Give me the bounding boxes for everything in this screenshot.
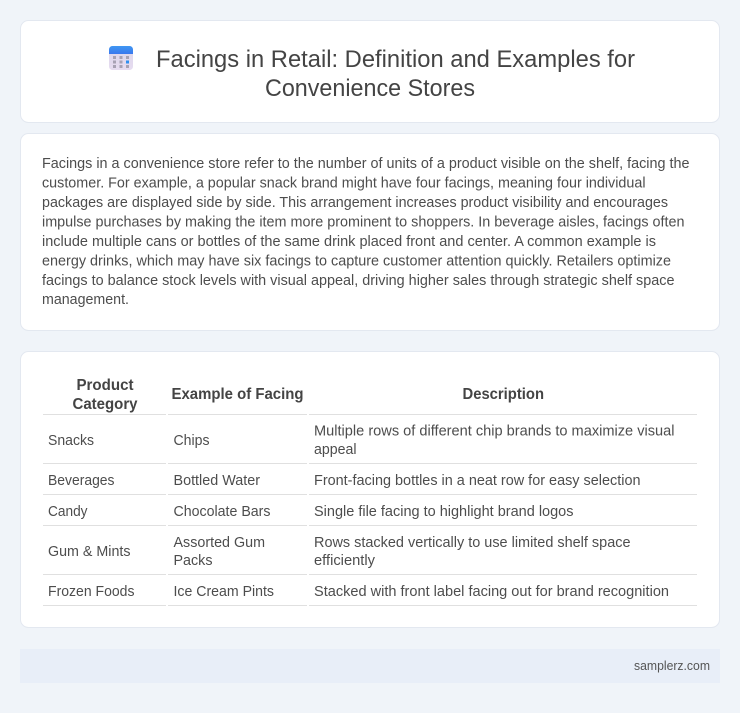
- table row: candy: Chocolate Bars: [174, 504, 270, 520]
- panel: introduction: [20, 134, 720, 330]
- title text: [156, 46, 635, 102]
- text block: definition paragraph: customer. For example, a popular snack brand might have four facings, meaning four individual: [42, 176, 646, 192]
- table row: beverages: Bottled Water: [174, 473, 260, 489]
- title text: Convenience Stores: [265, 75, 475, 102]
- table row: frozen foods: Ice Cream Pints: [174, 584, 274, 600]
- icon: calendar: [109, 46, 133, 70]
- table row: candy: [48, 504, 574, 520]
- table row: gum and mints: efficiently: [314, 553, 376, 569]
- table row: candy: Single file facing to highlight brand logos: [314, 504, 574, 520]
- table row: frozen foods: [48, 584, 669, 600]
- table row: candy: Candy: [48, 504, 88, 520]
- table row: gum and mints: Rows stacked vertically to use limited shelf space: [314, 535, 630, 551]
- title text: Facings in Retail: Definition and Examples for: [156, 46, 635, 73]
- text block: definition paragraph: [42, 156, 690, 308]
- text block: definition paragraph: packages are displayed side by side. This arrangement increases product visibility and encourages: [42, 195, 668, 211]
- table row: beverages: [48, 473, 640, 489]
- table row: beverages: Beverages: [48, 473, 114, 489]
- text block: definition paragraph: impulse purchases by making the item more prominent to shoppers. In beverage aisles, facings often: [42, 214, 684, 230]
- panel: table: [20, 352, 720, 628]
- table header: [72, 377, 544, 413]
- table row: gum and mints: Packs: [174, 553, 212, 569]
- table row: gum and mints: Assorted Gum: [174, 535, 265, 551]
- table row: snacks: Snacks: [48, 433, 94, 449]
- table header: Product: [76, 377, 134, 394]
- table row: snacks: appeal: [314, 442, 356, 458]
- text block: definition paragraph: Facings in a convenience store refer to the number of units of a product visible on the shelf, facing the: [42, 156, 690, 172]
- text block: definition paragraph: include multiple cans or bottles of the same drink placed front and center. A common example is: [42, 234, 656, 250]
- table row: snacks: [48, 424, 674, 458]
- table row: frozen foods: Frozen Foods: [48, 584, 134, 600]
- table row: snacks: Chips: [174, 433, 210, 449]
- panel: title: [20, 20, 720, 122]
- table row: beverages: Front-facing bottles in a neat row for easy selection: [314, 473, 640, 489]
- table row: snacks: Multiple rows of different chip brands to maximize visual: [314, 424, 674, 440]
- footer: [20, 649, 720, 683]
- table row: frozen foods: Stacked with front label facing out for brand recognition: [314, 584, 669, 600]
- table row: gum and mints: Gum & Mints: [48, 544, 130, 560]
- text block: definition paragraph: energy drinks, which may have six facings to capture customer attention quickly. Retailers optimize: [42, 254, 671, 270]
- table header: Example of Facing: [172, 386, 304, 403]
- table row: gum and mints: [48, 535, 630, 569]
- text block: definition paragraph: management.: [42, 292, 129, 308]
- table header: Description: [462, 386, 544, 403]
- table header: Category: [72, 396, 138, 413]
- text block: definition paragraph: facings to balance stock levels with visual appeal, driving higher sales through strategic shelf space: [42, 273, 674, 289]
- footer source text: samplerz.com: [634, 658, 710, 673]
